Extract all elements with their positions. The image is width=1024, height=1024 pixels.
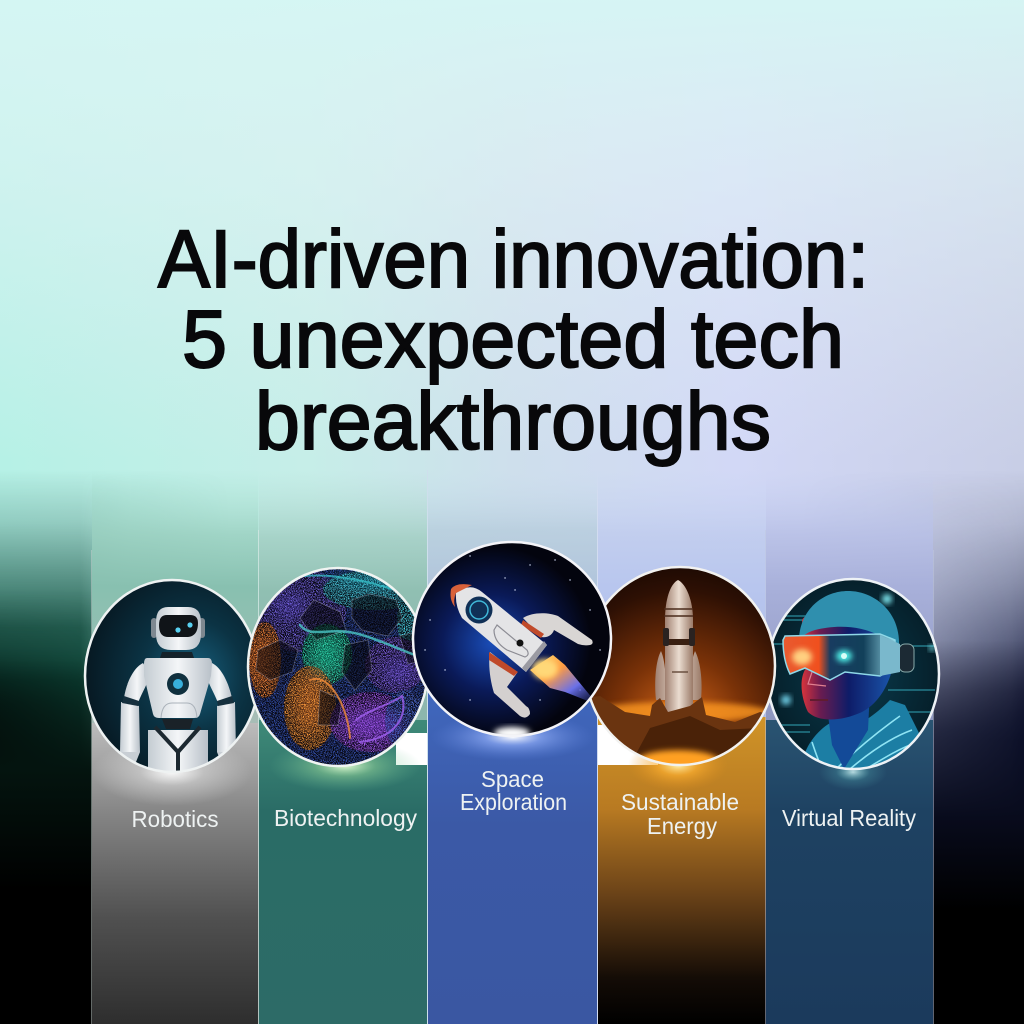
robe — [802, 700, 920, 769]
column: space exploration — [428, 470, 597, 1024]
robot legs and pelvis — [148, 730, 208, 772]
stars — [425, 556, 600, 700]
column: robotics — [92, 470, 258, 1024]
icon: robot — [85, 580, 259, 772]
title: 5 unexpected tech — [182, 294, 844, 385]
title: breakthroughs — [255, 376, 771, 467]
robot torso — [144, 658, 212, 718]
labels: Exploration — [460, 789, 567, 815]
labels — [132, 766, 916, 839]
title — [158, 214, 869, 467]
icon: biotechnology globe — [248, 568, 428, 766]
robot arms — [120, 663, 236, 752]
soft colour glow — [252, 574, 418, 741]
flame — [530, 655, 590, 700]
labels: Space — [481, 766, 544, 792]
robot core — [167, 673, 189, 695]
column: virtual reality — [766, 470, 934, 1024]
icon: space rocket — [413, 542, 611, 739]
glowing veins — [298, 574, 414, 743]
rocket fins — [523, 613, 593, 645]
rocket body — [665, 580, 693, 712]
labels: Energy — [647, 813, 717, 839]
face — [802, 616, 891, 720]
rocket nose — [450, 584, 472, 607]
rocket window — [466, 596, 492, 624]
rocket body — [456, 587, 547, 672]
labels: Virtual Reality — [782, 805, 916, 831]
goggles — [783, 634, 895, 680]
hair — [799, 591, 899, 645]
neck — [828, 707, 870, 768]
labels: Sustainable — [621, 789, 739, 815]
title: AI-driven innovation: — [158, 214, 869, 305]
icon: rocket launch — [585, 567, 775, 774]
rocks — [592, 696, 762, 752]
robot head — [151, 618, 157, 638]
icon: virtual reality head — [767, 579, 939, 769]
rocket boosters — [655, 651, 702, 700]
speckled colour fields — [248, 568, 428, 766]
launch glow — [590, 702, 770, 722]
labels: Biotechnology — [274, 805, 417, 831]
labels: Robotics — [132, 806, 218, 832]
column: biotechnology — [258, 470, 427, 1024]
column: sustainable energy — [598, 470, 766, 1024]
dark cells — [256, 594, 426, 725]
